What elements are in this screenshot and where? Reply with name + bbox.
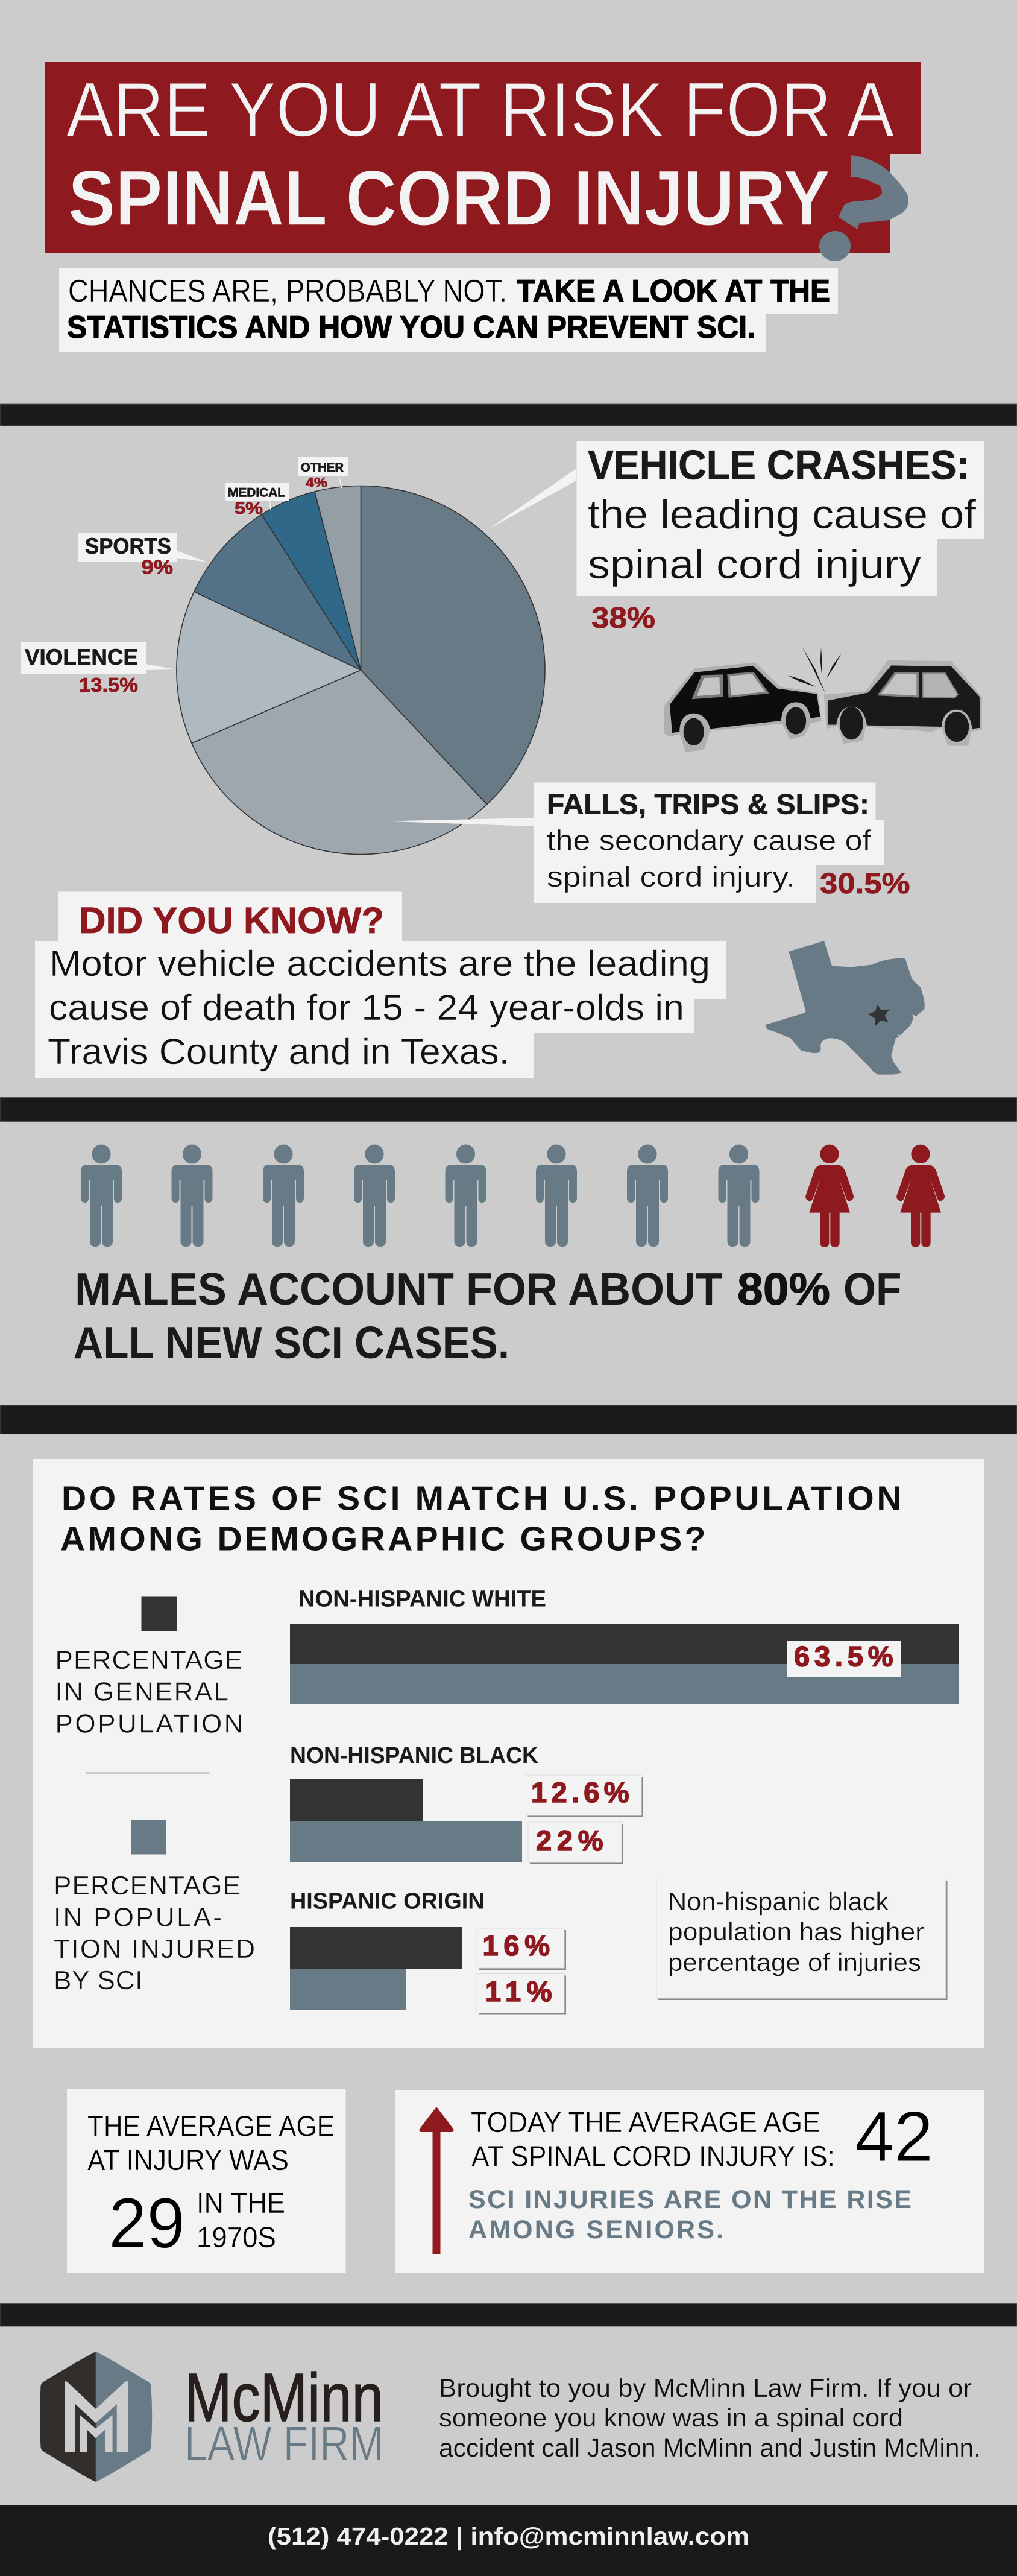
callout: vehicle crashes: VEHICLE CRASHES:	[588, 441, 969, 489]
callout: falls, trips and slips: spinal cord injury.	[547, 861, 795, 893]
legend: injured population: PERCENTAGE	[54, 1871, 241, 1900]
note box: percentage of injuries	[668, 1948, 921, 1976]
panel: average age in the 1970s: IN THE	[197, 2188, 285, 2220]
subtitle line 2: STATISTICS AND HOW YOU CAN PREVENT SCI.	[67, 310, 755, 345]
legend: injured population: TION INJURED	[54, 1934, 255, 1964]
bar group: hispanic origin: 16%	[482, 1929, 550, 1961]
panel: average age today: AT SPINAL CORD INJURY IS:	[471, 2141, 835, 2173]
icon: male figure 6	[536, 1145, 577, 1247]
slice: violence 13.5%	[177, 592, 361, 743]
header section	[45, 62, 921, 352]
sponsor text: someone you know was in a spinal cord	[439, 2404, 903, 2432]
callout: medical: MEDICAL	[228, 486, 285, 499]
legend: injured population: IN POPULA-	[54, 1902, 222, 1932]
icon: male figure 1	[81, 1145, 122, 1247]
icon: female figure 1	[805, 1145, 854, 1247]
pictogram row	[81, 1145, 945, 1247]
slice: vehicle crashes 38%	[361, 486, 545, 805]
panel heading: AMONG DEMOGRAPHIC GROUPS?	[60, 1520, 705, 1559]
subtitle line 1: CHANCES ARE, PROBABLY NOT.	[68, 274, 507, 309]
statistic headline: ALL NEW SCI CASES.	[74, 1317, 509, 1368]
logo wordmark: McMinn	[184, 2359, 383, 2435]
icon: question mark	[819, 155, 908, 261]
gender section	[74, 1145, 945, 1368]
subtitle box	[59, 268, 838, 352]
title line 2: SPINAL CORD INJURY	[68, 154, 830, 242]
bar group: non-hispanic black: NON-HISPANIC BLACK	[290, 1743, 539, 1768]
statistic headline: 80%	[737, 1264, 830, 1314]
subtitle line 1 bold: TAKE A LOOK AT THE	[517, 274, 830, 309]
pie chart	[177, 486, 545, 855]
callout: other: OTHER	[301, 461, 344, 475]
panel: average age in the 1970s: AT INJURY WAS	[87, 2145, 289, 2177]
bar group: non-hispanic black: 22%	[536, 1824, 603, 1856]
callout: sports	[78, 533, 207, 578]
callout: medical: 5%	[235, 499, 263, 517]
callout: falls, trips and slips: FALLS, TRIPS & SLIPS:	[547, 788, 869, 820]
logo wordmark: LAW FIRM	[184, 2417, 383, 2471]
footer brand row	[40, 2352, 981, 2482]
logo mark	[40, 2352, 152, 2482]
note box: Non-hispanic black	[668, 1887, 889, 1916]
panel: average age today: TODAY THE AVERAGE AGE	[471, 2107, 820, 2139]
contact bar	[0, 2505, 1017, 2576]
causes section	[21, 441, 984, 1078]
did you know text block: Motor vehicle accidents are the leading	[49, 943, 710, 984]
contact bar: (512) 474-0222 | info@mcminnlaw.com	[268, 2522, 749, 2550]
arrow	[419, 2107, 454, 2254]
callout: sports: SPORTS	[85, 534, 171, 559]
note box: population has higher	[668, 1917, 924, 1946]
panel: average age in the 1970s	[67, 2089, 346, 2273]
did you know heading: DID YOU KNOW?	[79, 900, 384, 941]
legend: general population: IN GENERAL	[55, 1677, 228, 1707]
panel: average age today	[395, 2090, 984, 2273]
bar group: non-hispanic white: 63.5%	[794, 1641, 893, 1672]
slice: sports 9%	[194, 514, 361, 670]
panel: average age today: AMONG SENIORS.	[468, 2215, 723, 2244]
title banner	[45, 62, 921, 253]
note box	[656, 1879, 948, 2000]
left car	[664, 662, 822, 752]
panel: average age in the 1970s: THE AVERAGE AGE	[87, 2111, 335, 2142]
legend: general population: PERCENTAGE	[55, 1645, 242, 1675]
icon: male figure 4	[354, 1145, 395, 1247]
right car	[824, 660, 982, 746]
callout: vehicle crashes: 38%	[591, 602, 655, 635]
callout: vehicle crashes: the leading cause of	[588, 492, 976, 537]
callout: sports: 9%	[141, 556, 173, 578]
callout: vehicle crashes: spinal cord injury	[588, 542, 921, 587]
logo wordmark	[184, 2359, 383, 2471]
callout: other: 4%	[306, 475, 327, 490]
bar group: non-hispanic black	[290, 1743, 643, 1864]
panel heading	[60, 1479, 902, 1559]
divider band 4	[0, 2304, 1017, 2326]
callout: other	[298, 457, 348, 490]
did you know text block: Travis County and in Texas.	[48, 1031, 509, 1072]
panel: demographics	[33, 1459, 984, 2048]
bar group: hispanic origin	[290, 1889, 566, 2014]
icon: male figure 5	[445, 1145, 486, 1247]
divider band 3	[0, 1405, 1017, 1434]
panel heading: DO RATES OF SCI MATCH U.S. POPULATION	[61, 1479, 902, 1517]
divider band 1	[0, 404, 1017, 426]
icon: female figure 2	[896, 1145, 945, 1247]
legend: general population	[55, 1596, 244, 1738]
callout: falls, trips and slips: 30.5%	[820, 868, 910, 900]
icon: Texas map with star	[765, 941, 925, 1075]
title line 1: ARE YOU AT RISK FOR A	[66, 67, 895, 153]
legend: general population: POPULATION	[55, 1709, 244, 1738]
panel: average age in the 1970s: 29	[109, 2183, 185, 2263]
did you know text block: cause of death for 15 - 24 year-olds in	[49, 987, 684, 1028]
legend: injured population: BY SCI	[54, 1966, 142, 1995]
callout: falls, trips and slips: the secondary cause of	[547, 824, 872, 856]
legend: injured population	[54, 1820, 255, 1995]
sponsor text: Brought to you by McMinn Law Firm. If you or	[439, 2374, 972, 2403]
callout: violence: VIOLENCE	[25, 645, 138, 669]
sponsor text: accident call Jason McMinn and Justin McMinn.	[439, 2434, 981, 2463]
callout: violence: 13.5%	[79, 674, 138, 696]
statistic headline: MALES ACCOUNT FOR ABOUT	[75, 1264, 722, 1314]
icon: male figure 8	[719, 1145, 760, 1247]
slice: medical 5%	[262, 492, 361, 670]
bar group: hispanic origin: 11%	[485, 1975, 552, 2007]
did you know text block	[35, 941, 726, 1078]
bar group: non-hispanic black: 12.6%	[531, 1776, 629, 1808]
bar group: non-hispanic white	[290, 1586, 959, 1704]
panel: average age in the 1970s: 1970S	[197, 2222, 276, 2254]
panel: average age today: SCI INJURIES ARE ON THE RISE	[468, 2185, 912, 2214]
icon: male figure 7	[627, 1145, 668, 1247]
icon: crashing cars	[664, 647, 982, 752]
bar group: non-hispanic white: NON-HISPANIC WHITE	[298, 1586, 546, 1612]
statistic headline	[74, 1264, 902, 1368]
slice: falls 30.5%	[192, 670, 487, 855]
statistic headline: OF	[843, 1264, 902, 1314]
bar group: hispanic origin: HISPANIC ORIGIN	[290, 1889, 485, 1914]
callout: medical	[225, 483, 289, 517]
callout: violence	[21, 642, 177, 696]
panel: average age today: 42	[855, 2097, 933, 2177]
callout: falls, trips and slips	[385, 783, 910, 903]
sponsor text	[439, 2374, 981, 2463]
impact marks	[787, 647, 842, 694]
callout: vehicle crashes	[488, 441, 984, 635]
slice: other 4%	[315, 486, 361, 670]
icon: male figure 3	[263, 1145, 304, 1247]
icon: male figure 2	[171, 1145, 212, 1247]
divider band 2	[0, 1098, 1017, 1122]
